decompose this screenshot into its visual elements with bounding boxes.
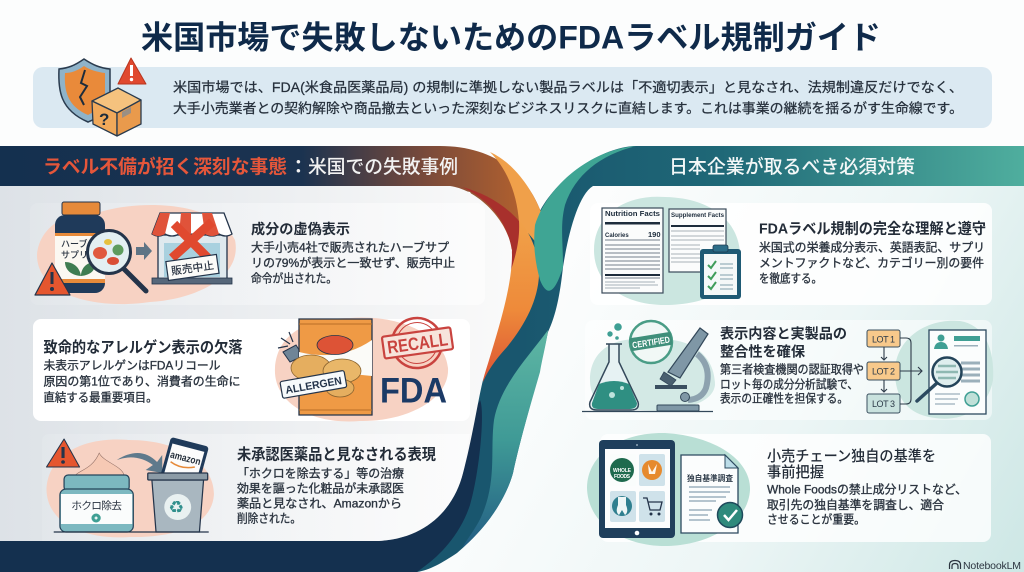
text: retailer standards: させることが重要。 <box>767 512 865 526</box>
icon: lot flow and inspection document <box>867 321 993 419</box>
icon: flask, certified stamp and microscope <box>582 321 715 412</box>
intro text <box>173 80 963 116</box>
header text: failure cases: 米国での失敗事例 <box>308 156 458 177</box>
text: unapproved drug claims: 薬品と見なされ、Amazonから <box>237 496 402 510</box>
text: retailer standards <box>767 448 967 526</box>
text: unapproved drug claims: 未承認医薬品と見なされる表現 <box>237 446 436 464</box>
card: allergen omission <box>33 313 470 421</box>
icon: allergen snack bag, recall stamp, FDA <box>275 313 455 421</box>
icon: supplement bottle to store closure: 販売中止 <box>170 258 215 278</box>
text: retailer standards: 小売チェーン独自の基準を <box>767 448 936 465</box>
icon: nutrition and supplement facts with clipboard: 190 <box>648 230 661 239</box>
icon: cream jar discarded and amazon <box>46 437 214 537</box>
decorative ribbon: orange stripe <box>490 152 541 245</box>
intro text: 米国市場では、FDA(米食品医薬品局) の規制に準拠しない製品ラベルは「不適切表示」と見なされ、法規制違反だけでなく、 <box>173 80 963 95</box>
header text: failure cases: ： <box>289 156 308 177</box>
card: false ingredient claims <box>30 202 485 305</box>
icon: nutrition and supplement facts with clipboard <box>594 197 741 305</box>
icon: supplement bottle to store closure: サプリ <box>61 250 88 260</box>
icon: supplement bottle to store closure: ハーブ <box>61 238 87 249</box>
decorative ribbon: lower teal <box>462 330 548 548</box>
icon: tablet with retailers and survey document: FOODS <box>614 474 631 480</box>
title: 米国市場で失敗しないためのFDAラベル規制ガイド <box>141 20 881 56</box>
icon: cream jar discarded and amazon: ♻ <box>168 498 184 518</box>
text: unapproved drug claims: 削除された。 <box>237 512 301 526</box>
text: unapproved drug claims: 効果を謳った化粧品が未承認医 <box>237 480 404 496</box>
decorative ribbon: dark teal <box>300 146 1024 572</box>
text: allergen omission: 致命的なアレルゲン表示の欠落 <box>44 338 242 356</box>
panel: failure cases <box>0 155 512 541</box>
text: retailer standards: Whole Foodsの禁止成分リストなど、 <box>767 482 967 496</box>
text: label and product consistency: 整合性を確保 <box>720 344 806 360</box>
card: full understanding of FDA rules <box>590 197 992 305</box>
text: allergen omission: 直結する最重要項目。 <box>44 390 158 404</box>
icon: nutrition and supplement facts with clipboard: Calories <box>605 233 629 239</box>
card: retailer standards <box>587 433 991 546</box>
right section background <box>400 186 1024 572</box>
text: retailer standards: 事前把握 <box>767 464 824 481</box>
icon: cream jar discarded and amazon: amazon <box>169 450 202 468</box>
watermark: NotebookLM: NotebookLM <box>963 560 1021 572</box>
intro text: 大手小売業者との契約解除や商品撤去といった深刻なビジネスリスクに直結します。これは事業の継続を揺るがす生命線です。 <box>173 100 963 116</box>
icon: cream jar discarded and amazon: ホクロ除去 <box>71 499 122 512</box>
intro panel <box>33 67 992 128</box>
text: label and product consistency: 表示の正確性を担保する。 <box>720 390 848 406</box>
text: allergen omission <box>44 338 242 404</box>
icon: nutrition and supplement facts with clipboard: Supplement Facts <box>671 212 724 219</box>
text: full understanding of FDA rules: メントファクトなど、カテゴリー別の要件 <box>759 255 984 270</box>
text: unapproved drug claims <box>237 446 436 526</box>
text: full understanding of FDA rules: を徹底する。 <box>759 270 822 286</box>
text: false ingredient claims: リの79%が表示と一致せず、販売中止 <box>251 255 455 270</box>
icon: allergen snack bag, recall stamp, FDA: RECALL <box>386 329 449 358</box>
text: full understanding of FDA rules: FDAラベル規制の完全な理解と遵守 <box>759 220 986 238</box>
icon: cracked shield, warning and box: ? <box>99 110 109 129</box>
text: label and product consistency: 第三者検査機関の認証取得や <box>720 362 864 376</box>
icon: flask, certified stamp and microscope: CERTIFIED <box>632 335 671 350</box>
card: unapproved drug claims <box>42 434 470 541</box>
text: retailer standards: 取引先の独自基準を調査し、適合 <box>767 497 944 512</box>
icon: allergen snack bag, recall stamp, FDA: ALLERGEN <box>285 375 343 397</box>
decorative ribbon: orange <box>483 220 539 382</box>
icon: cracked shield, warning and box <box>59 58 146 136</box>
icon: nutrition and supplement facts with clipboard: Nutrition Facts <box>605 209 660 218</box>
header text: required actions: 日本企業が取るべき必須対策 <box>669 156 915 178</box>
text: full understanding of FDA rules <box>759 220 986 286</box>
icon: allergen snack bag, recall stamp, FDA: FDA <box>380 372 447 410</box>
text: false ingredient claims <box>251 221 455 286</box>
text: label and product consistency: 表示内容と実製品の <box>720 326 847 342</box>
text: false ingredient claims: 命令が出された。 <box>251 270 337 286</box>
text: allergen omission: 原因の第1位であり、消費者の生命に <box>44 374 240 388</box>
decorative ribbon: upper teal <box>534 146 636 291</box>
text: false ingredient claims: 大手小売4社で販売されたハーブサプ <box>251 240 449 254</box>
icon: tablet with retailers and survey document: 独自基準調査 <box>687 473 733 483</box>
decorative ribbon: navy base <box>0 400 482 572</box>
icon: lot flow and inspection document: LOT 3 <box>872 399 895 409</box>
card: label and product consistency <box>582 320 993 420</box>
text: allergen omission: 未表示アレルゲンはFDAリコール <box>44 358 220 372</box>
header text: failure cases: ラベル不備が招く深刻な事態 <box>43 155 287 177</box>
icon: tablet with retailers and survey document <box>587 433 750 546</box>
icon: supplement bottle to store closure <box>35 202 236 304</box>
text: unapproved drug claims: 「ホクロを除去する」等の治療 <box>237 466 404 480</box>
text: full understanding of FDA rules: 米国式の栄養成分表示、英語表記、サプリ <box>759 240 985 254</box>
header text: failure cases <box>43 155 458 177</box>
band: failure cases header <box>0 146 541 255</box>
icon: tablet with retailers and survey document: WHOLE <box>613 468 632 474</box>
text: label and product consistency: ロット毎の成分分析試験で、 <box>720 376 858 392</box>
panel: required actions <box>582 197 993 546</box>
icon: lot flow and inspection document: LOT 2 <box>872 366 895 376</box>
text: label and product consistency <box>720 326 864 406</box>
decorative ribbon: dark red <box>462 187 519 273</box>
text: false ingredient claims: 成分の虚偽表示 <box>251 221 350 237</box>
icon: lot flow and inspection document: LOT 1 <box>872 334 895 344</box>
